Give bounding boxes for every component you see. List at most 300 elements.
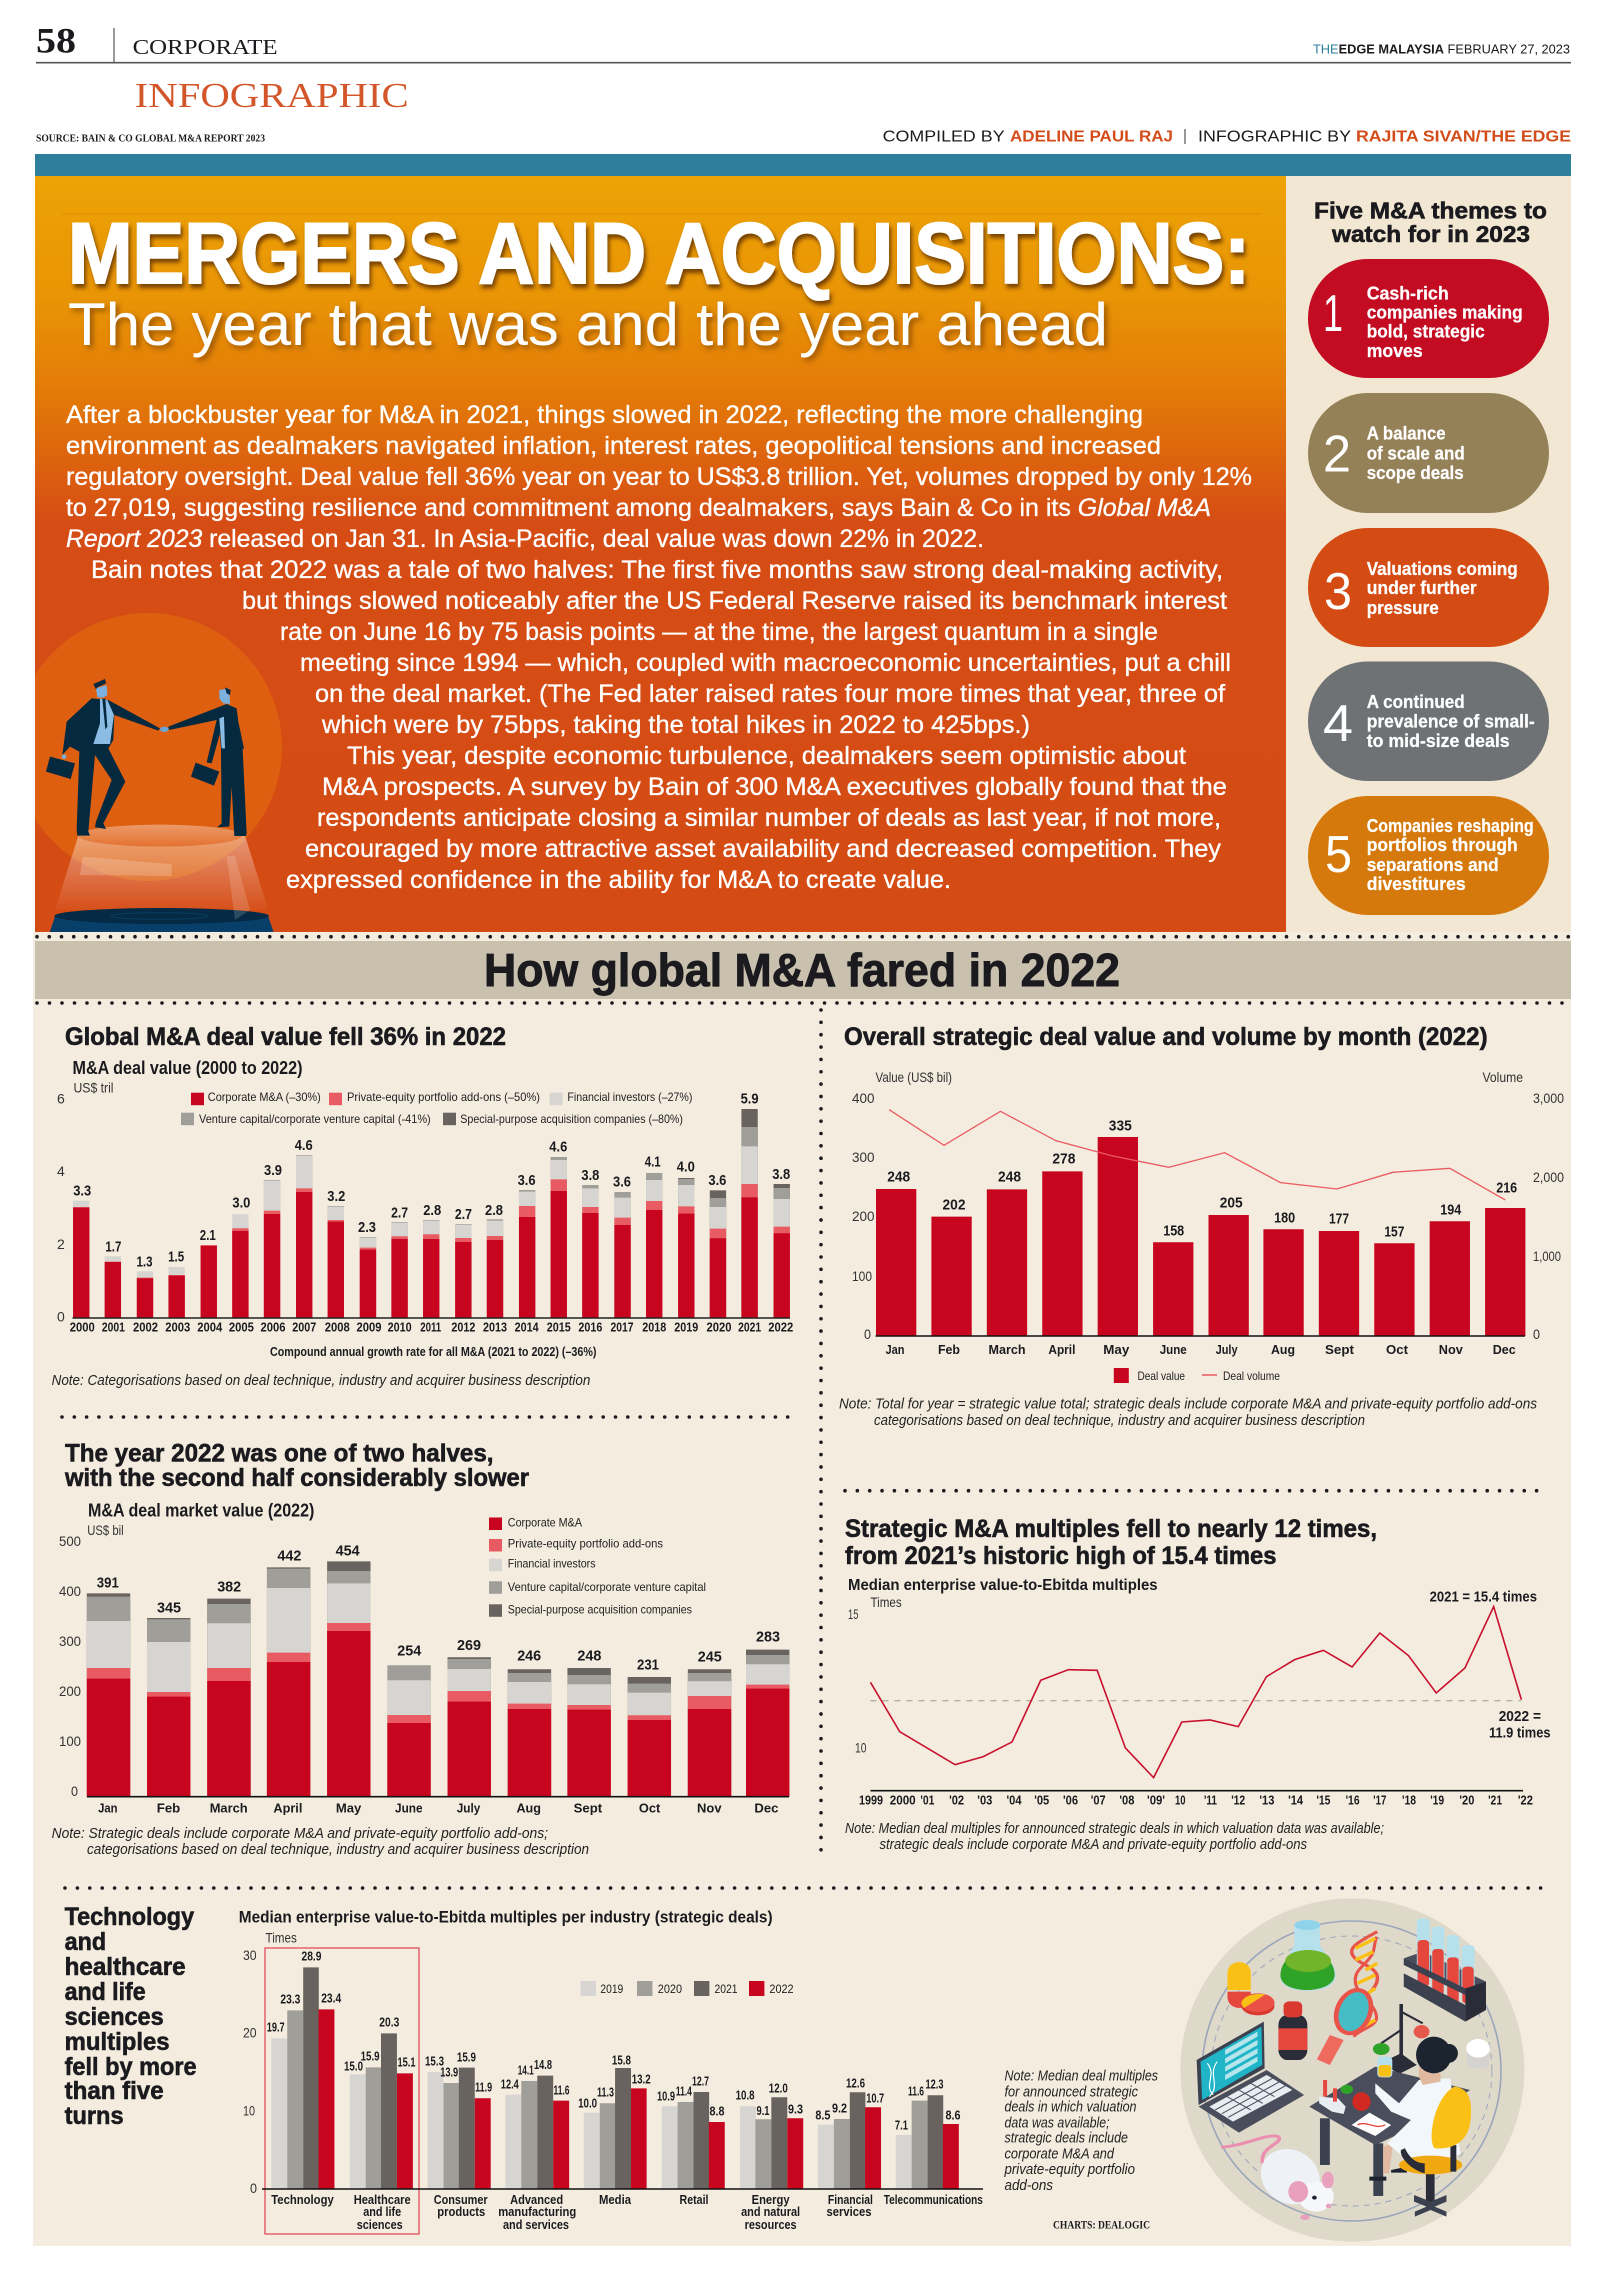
note: multiples: Note: Median deal multiples [1004,2069,1158,2085]
chart note: strategic deals include corporate M&A and private-equity portfolio add-ons [880,1837,1307,1853]
legend: Deal volume [1223,1369,1280,1383]
page header [36,21,1571,146]
bar value labels: 15.1 [398,2055,416,2070]
year labels: 10 [1175,1793,1186,1808]
monthly value labels: 269 [457,1637,481,1654]
year labels: '18 [1402,1793,1416,1808]
monthly value labels [97,1543,780,1674]
industry labels: Retail [680,2192,708,2207]
y axis: 0 [250,2180,257,2196]
bar value labels: 3.6 [708,1172,726,1189]
chart credit: CHARTS: DEALOGIC [1053,2218,1150,2232]
year labels: 2021 [738,1320,761,1335]
chart panel: strategic deal value and volume [839,1023,1564,1429]
body text: which were by 75bps, taking the total hikes in 2022 to 425bps.) [321,711,1030,739]
y axis: 0 [57,1309,65,1325]
industry labels: resources [745,2217,797,2232]
body text: on the deal market. (The Fed later raised rates four more times that year, three of [315,680,1225,708]
month labels: April [273,1801,302,1816]
monthly value labels: 216 [1496,1180,1517,1197]
y axis: 10 [855,1740,867,1756]
heading: technology and healthcare: and life [65,1978,146,2006]
y axis: Times [870,1594,902,1610]
chart title: Strategic M&A multiples fell to nearly 12 times, [845,1515,1377,1543]
theme 1 pill [1308,259,1549,378]
bar value labels [73,1091,790,1271]
body text: expressed confidence in the ability for M&A to create value. [286,866,951,894]
legend: Private-equity portfolio add-ons [508,1537,663,1551]
bar value labels: 14.1 [518,2062,534,2077]
year labels: '09' [1147,1793,1165,1808]
illustration: handshake on globe [14,613,282,933]
year labels: '02 [949,1793,964,1808]
pedestal base [49,825,274,933]
industry labels: Advanced [510,2192,563,2207]
year labels: '20 [1459,1793,1474,1808]
bar value labels: 4.0 [677,1159,695,1176]
chart panel: global deal value 2000-2022 [52,1023,793,1389]
year labels: 2016 [578,1320,602,1335]
year labels: '13 [1259,1793,1274,1808]
year labels: 2019 [674,1320,698,1335]
legend: Financial investors (–27%) [567,1090,692,1104]
chart panel: strategic multiples line chart [845,1515,1550,1853]
bar value labels: 11.6 [908,2084,924,2099]
industry labels: Financial [828,2192,873,2207]
bar value labels: 8.5 [815,2107,830,2122]
chart panel: 2022 monthly deal market value [52,1440,789,1858]
heading: technology and healthcare: than five [65,2077,164,2105]
icon: lab stand [1373,2004,1429,2074]
multiples line [870,1607,1521,1778]
axes labels: Value (US$ bil) [876,1069,952,1085]
year labels: 2003 [165,1320,190,1335]
monthly value labels: 248 [577,1648,601,1665]
axes labels: 2,000 [1533,1169,1564,1185]
note: multiples: for announced strategic [1004,2085,1139,2101]
bar value labels: 2.1 [200,1227,216,1244]
legend: Private-equity portfolio add-ons (–50%) [347,1090,540,1104]
section heading band: How global M&A fared in 2022 [484,944,1120,996]
axes labels: 200 [852,1208,875,1224]
chart subtitle: Median enterprise value-to-Ebitda multiples [848,1577,1158,1594]
month labels: Dec [1493,1342,1516,1357]
y axis: 200 [59,1683,81,1699]
month labels: Sept [574,1801,603,1816]
y axis: 20 [243,2025,257,2041]
bar value labels: 15.9 [457,2050,476,2065]
subtitle: The year that was and the year ahead [68,291,1108,358]
bar value labels: 8.6 [946,2108,960,2123]
year labels: '15 [1316,1793,1330,1808]
month labels: March [210,1801,248,1816]
note: multiples: add-ons [1004,2178,1053,2194]
legend: Corporate M&A (–30%) [208,1090,321,1104]
year labels: 2005 [229,1320,254,1335]
month labels: May [1103,1342,1130,1357]
kicker: INFOGRAPHIC [135,76,409,115]
axes labels: 0 [864,1326,871,1342]
icon: flask [1280,1920,1336,1991]
monthly bars and volume line [876,1110,1525,1336]
lower section background [33,932,1571,2246]
icon: DNA helix [1352,1932,1377,2037]
chart title: Overall strategic deal value and volume by month (2022) [844,1023,1488,1051]
y axis: 10 [243,2103,255,2119]
icon: scientist [1369,2037,1460,2181]
year labels: 2001 [102,1320,125,1335]
note: multiples: corporate M&A and [1004,2147,1115,2163]
month labels: July [457,1801,481,1816]
year labels: '14 [1288,1793,1304,1808]
y axis: 2 [57,1236,65,1252]
legend [581,1981,794,1996]
industry labels: Technology [271,2192,334,2207]
bar value labels: 8.8 [710,2104,724,2119]
chart note [845,1821,1384,1853]
month labels: Sept [1325,1342,1355,1357]
y axis [243,1930,297,2196]
monthly value labels: 194 [1440,1201,1462,1218]
bar value labels: 12.3 [926,2077,944,2092]
theme 1 pill: Cash-rich [1367,283,1449,303]
icon: desk [1309,2057,1470,2196]
monthly value labels: 157 [1384,1224,1404,1241]
industry labels: sciences [357,2217,403,2232]
bar value labels: 3.9 [264,1162,282,1179]
icon: test tubes rack [1404,1918,1486,2022]
bar value labels: 20.3 [379,2015,399,2030]
year labels: '07 [1091,1793,1106,1808]
chart note: Note: Strategic deals include corporate M&A and private-equity portfolio add-ons; [52,1826,548,1842]
y axis: 300 [59,1633,81,1649]
month labels: Aug [1271,1342,1295,1357]
year labels: '08 [1119,1793,1134,1808]
industry labels: Telecommunications [884,2192,983,2207]
bar value labels: 3.6 [613,1174,631,1191]
year labels: 2020 [706,1320,732,1335]
year labels [859,1793,1533,1808]
page number: 58 [36,21,76,61]
left businessman [46,679,160,836]
industry labels: and services [503,2217,569,2232]
y axis: 4 [57,1163,65,1179]
monthly value labels: 245 [698,1649,722,1666]
bar value labels: 12.0 [769,2081,788,2096]
section name: CORPORATE [133,35,278,59]
note: multiples: deals in which valuation [1004,2100,1136,2116]
note: multiples: data was available; [1004,2116,1110,2132]
bar value labels: 10.9 [657,2089,675,2104]
body text: Bain notes that 2022 was a tale of two halves: The first five months saw strong deal-making activity, [91,556,1223,584]
bar value labels: 10.8 [736,2088,755,2103]
industry labels: manufacturing [498,2204,576,2219]
body text: respondents anticipate closing a similar number of deals as last year, if not more, [317,804,1221,832]
year labels [70,1320,793,1335]
heading: technology and healthcare [65,1903,197,2130]
axes labels: Volume [1482,1069,1523,1085]
theme 1 pill: bold, strategic [1367,322,1485,342]
bar value labels: 9.3 [788,2102,803,2117]
year labels: 2010 [388,1320,412,1335]
bar value labels: 2.3 [358,1219,376,1236]
illustration: science lab [1180,1898,1524,2242]
panel: five themes [1286,176,1571,932]
y axis: 500 [59,1533,81,1549]
legend: Deal value [1138,1369,1185,1383]
month labels: Feb [157,1801,180,1816]
monthly value labels: 158 [1163,1223,1184,1240]
month labels: Nov [1439,1342,1464,1357]
bar value labels: 14.8 [534,2057,552,2072]
theme 1 pill: 1 [1323,285,1343,343]
month labels: June [395,1801,423,1816]
bar value labels: 15.0 [344,2059,363,2074]
bar value labels: 2.8 [423,1202,441,1219]
body text: M&A prospects. A survey by Bain of 300 M&A executives globally found that the [322,773,1227,801]
bar value labels: 3.6 [518,1172,536,1189]
source line: SOURCE: BAIN & CO GLOBAL M&A REPORT 2023 [36,134,265,145]
theme 2 pill: A balance [1367,424,1446,444]
monthly value labels: 205 [1220,1194,1243,1211]
y axis [57,1080,114,1325]
chart note [839,1397,1537,1429]
monthly value labels: 283 [756,1629,780,1646]
bar value labels: 23.3 [280,1991,300,2006]
year labels: 2013 [483,1320,507,1335]
theme 3 pill [1308,528,1549,647]
month labels [886,1342,1516,1357]
body text: This year, despite economic turbulence, dealmakers seem optimistic about [347,742,1186,770]
chart note: Note: Median deal multiples for announced strategic deals in which valuation data was available; [845,1821,1384,1837]
body text: meeting since 1994 — which, coupled with macroeconomic uncertainties, put a chill [300,649,1231,677]
bar value labels: 1.7 [105,1239,121,1256]
industry labels: Media [599,2192,632,2207]
industry labels [271,2192,983,2232]
themes heading: Five M&A themes to [1314,198,1547,224]
bar value labels: 13.2 [632,2072,651,2087]
bar value labels: 5.9 [741,1091,759,1108]
year labels: 2017 [610,1320,634,1335]
bar value labels: 2.7 [455,1206,472,1223]
theme 4 pill: A continued [1367,692,1465,712]
month labels: Nov [697,1801,722,1816]
body text: Report 2023 released on Jan 31. In Asia-Pacific, deal value was down 22% in 2022. [66,525,984,553]
month labels: May [336,1801,362,1816]
y axis: US$ bil [87,1522,124,1538]
theme 2 pill: 2 [1323,426,1351,484]
legend: 2021 [714,1982,738,1996]
bar value labels: 11.9 [475,2080,492,2095]
theme 5 pill: divestitures [1367,874,1466,894]
month labels: June [1160,1342,1187,1357]
year labels: 2022 [768,1320,793,1335]
legend: Venture capital/corporate venture capital [508,1580,706,1594]
legend [181,1090,692,1126]
year labels: 2000 [70,1320,95,1335]
theme 1 pill: companies making [1367,302,1523,322]
theme 5 pill: separations and [1367,855,1499,875]
page header: RAJITA SIVAN/THE EDGE [1356,129,1571,146]
year labels: '17 [1373,1793,1386,1808]
monthly value labels: 248 [998,1169,1021,1186]
bar value labels: 2.7 [391,1205,408,1222]
axes labels: 400 [852,1090,875,1106]
bar value labels: 3.2 [327,1188,345,1205]
blue band [35,154,1571,176]
theme 5 pill: Companies reshaping [1367,816,1534,836]
bar value labels: 9.1 [756,2103,770,2118]
themes heading: watch for in 2023 [1331,221,1530,247]
note: multiples: strategic deals include [1004,2131,1128,2147]
icon: medicine bottle [1278,2001,1307,2060]
monthly value labels [887,1118,1517,1241]
chart subtitle: M&A deal value (2000 to 2022) [72,1058,302,1078]
themes heading [1314,198,1547,247]
main title: MERGERS AND ACQUISITIONS: [68,206,1250,302]
stacked bars [73,1109,790,1318]
right businessman [160,687,247,836]
legend: Venture capital/corporate venture capital (-41%) [199,1112,431,1126]
monthly value labels: 246 [517,1648,541,1665]
bar value labels: 1.5 [168,1249,184,1266]
bar value labels: 4.1 [645,1154,661,1171]
theme 2 pill: scope deals [1367,463,1464,483]
year labels: 2006 [260,1320,286,1335]
industry labels: and natural [741,2204,800,2219]
axes labels: 3,000 [1533,1090,1564,1106]
y axis [848,1594,902,1756]
theme 2 pill [1308,393,1549,513]
monthly value labels: 335 [1109,1118,1132,1135]
month labels: April [1048,1342,1075,1357]
bar value labels: 11.4 [676,2084,692,2099]
theme 4 pill: to mid-size deals [1367,731,1510,751]
monthly value labels: 454 [336,1543,360,1560]
highlight box [265,1948,419,2234]
year labels: '16 [1346,1793,1360,1808]
theme 3 pill: 3 [1324,563,1352,621]
bar value labels: 3.3 [73,1183,91,1200]
callout: 2022 value: 11.9 times [1489,1725,1550,1742]
chart title [64,1440,529,1492]
hero panel [14,176,1286,933]
y axis: 6 [57,1090,65,1106]
month labels: Oct [639,1801,661,1816]
theme 1 pill: moves [1367,341,1423,361]
bar value labels: 9.2 [832,2101,847,2116]
chart note [52,1826,589,1858]
theme 3 pill: under further [1367,578,1477,598]
year labels: 2009 [356,1320,382,1335]
chart title: with the second half considerably slower [64,1464,529,1492]
year labels: 2018 [642,1320,666,1335]
axes labels: 300 [852,1149,875,1165]
chart title: Global M&A deal value fell 36% in 2022 [65,1023,506,1051]
monthly value labels: 177 [1329,1210,1349,1227]
theme 5 pill: 5 [1325,826,1352,884]
industry labels: and life [363,2204,401,2219]
y axis [59,1522,124,1799]
month labels: July [1216,1342,1238,1357]
year labels: 2012 [451,1320,475,1335]
y axis: US$ tril [74,1080,114,1096]
theme 2 pill: of scale and [1367,443,1465,463]
theme 4 pill [1308,662,1549,781]
theme 5 pill [1308,796,1549,915]
month labels: March [988,1342,1026,1357]
month labels: Dec [754,1801,778,1816]
year labels: '03 [977,1793,992,1808]
year labels: 2011 [420,1320,441,1335]
chart note: categorisations based on deal technique, industry and acquirer business description [87,1842,589,1858]
growth rate caption: Compound annual growth rate for all M&A (2021 to 2022) (–36%) [270,1345,596,1359]
year labels: 2014 [515,1320,539,1335]
legend: Special-purpose acquisition companies [508,1603,692,1617]
icon: chair [1399,2087,1471,2217]
note: multiples: private-equity portfolio [1004,2162,1135,2178]
monthly value labels: 254 [397,1643,422,1660]
year labels: 2002 [133,1320,158,1335]
heading: technology and healthcare: healthcare [65,1953,186,1981]
monthly value labels: 382 [217,1579,241,1596]
bar value labels: 2.8 [485,1202,503,1219]
bar value labels: 28.9 [302,1949,322,1964]
chart note: Note: Categorisations based on deal technique, industry and acquirer business description [52,1373,590,1389]
year labels: '01 [920,1793,934,1808]
bar value labels: 11.6 [554,2083,570,2098]
month labels [98,1801,778,1816]
bar value labels [267,1949,960,2133]
month labels: Oct [1386,1342,1409,1357]
heading: technology and healthcare: multiples [65,2028,170,2056]
legend [489,1516,706,1617]
heading: technology and healthcare: and [65,1928,106,1956]
theme 5 pill: portfolios through [1367,835,1518,855]
page header: ADELINE PAUL RAJ [1010,129,1173,146]
bar value labels: 3.0 [232,1195,250,1212]
stacked monthly bars [87,1561,789,1797]
body text: regulatory oversight. Deal value fell 36% year on year to US$3.8 trillion. Yet, volumes dropped by only 12% [66,463,1252,491]
bar value labels: 13.9 [440,2064,458,2079]
year labels: '05 [1034,1793,1049,1808]
body text: encouraged by more attractive asset availability and decreased competition. They [305,835,1221,863]
bar value labels: 15.3 [425,2053,444,2068]
month labels: Aug [516,1801,541,1816]
bar value labels: 12.7 [692,2074,709,2089]
icon: pills [1227,1962,1274,2015]
y axis: 400 [59,1583,81,1599]
heading: technology and healthcare: Technology [65,1903,194,1931]
heading: technology and healthcare: turns [65,2102,124,2130]
icon: lab mouse [1221,2136,1334,2220]
icon: laptop [1197,2022,1304,2133]
month labels: Feb [938,1342,960,1357]
page header: INFOGRAPHIC BY [1198,129,1351,146]
y axis: 100 [59,1733,81,1749]
industry labels: products [437,2204,485,2219]
year labels: 2008 [325,1320,350,1335]
chart panel: multiples per industry [239,1908,983,2234]
chart note: Note: Total for year = strategic value total; strategic deals include corporate M&A and private-equity portfolio add-ons [839,1397,1537,1413]
heading: technology and healthcare: fell by more [65,2053,197,2081]
monthly value labels: 202 [942,1196,966,1213]
body text [66,401,1252,894]
axes labels [852,1069,1564,1342]
body text: environment as dealmakers navigated inflation, interest rates, geopolitical tensions and increased [66,432,1161,460]
year labels: 1999 [859,1793,883,1808]
theme 4 pill: prevalence of small- [1367,712,1535,732]
